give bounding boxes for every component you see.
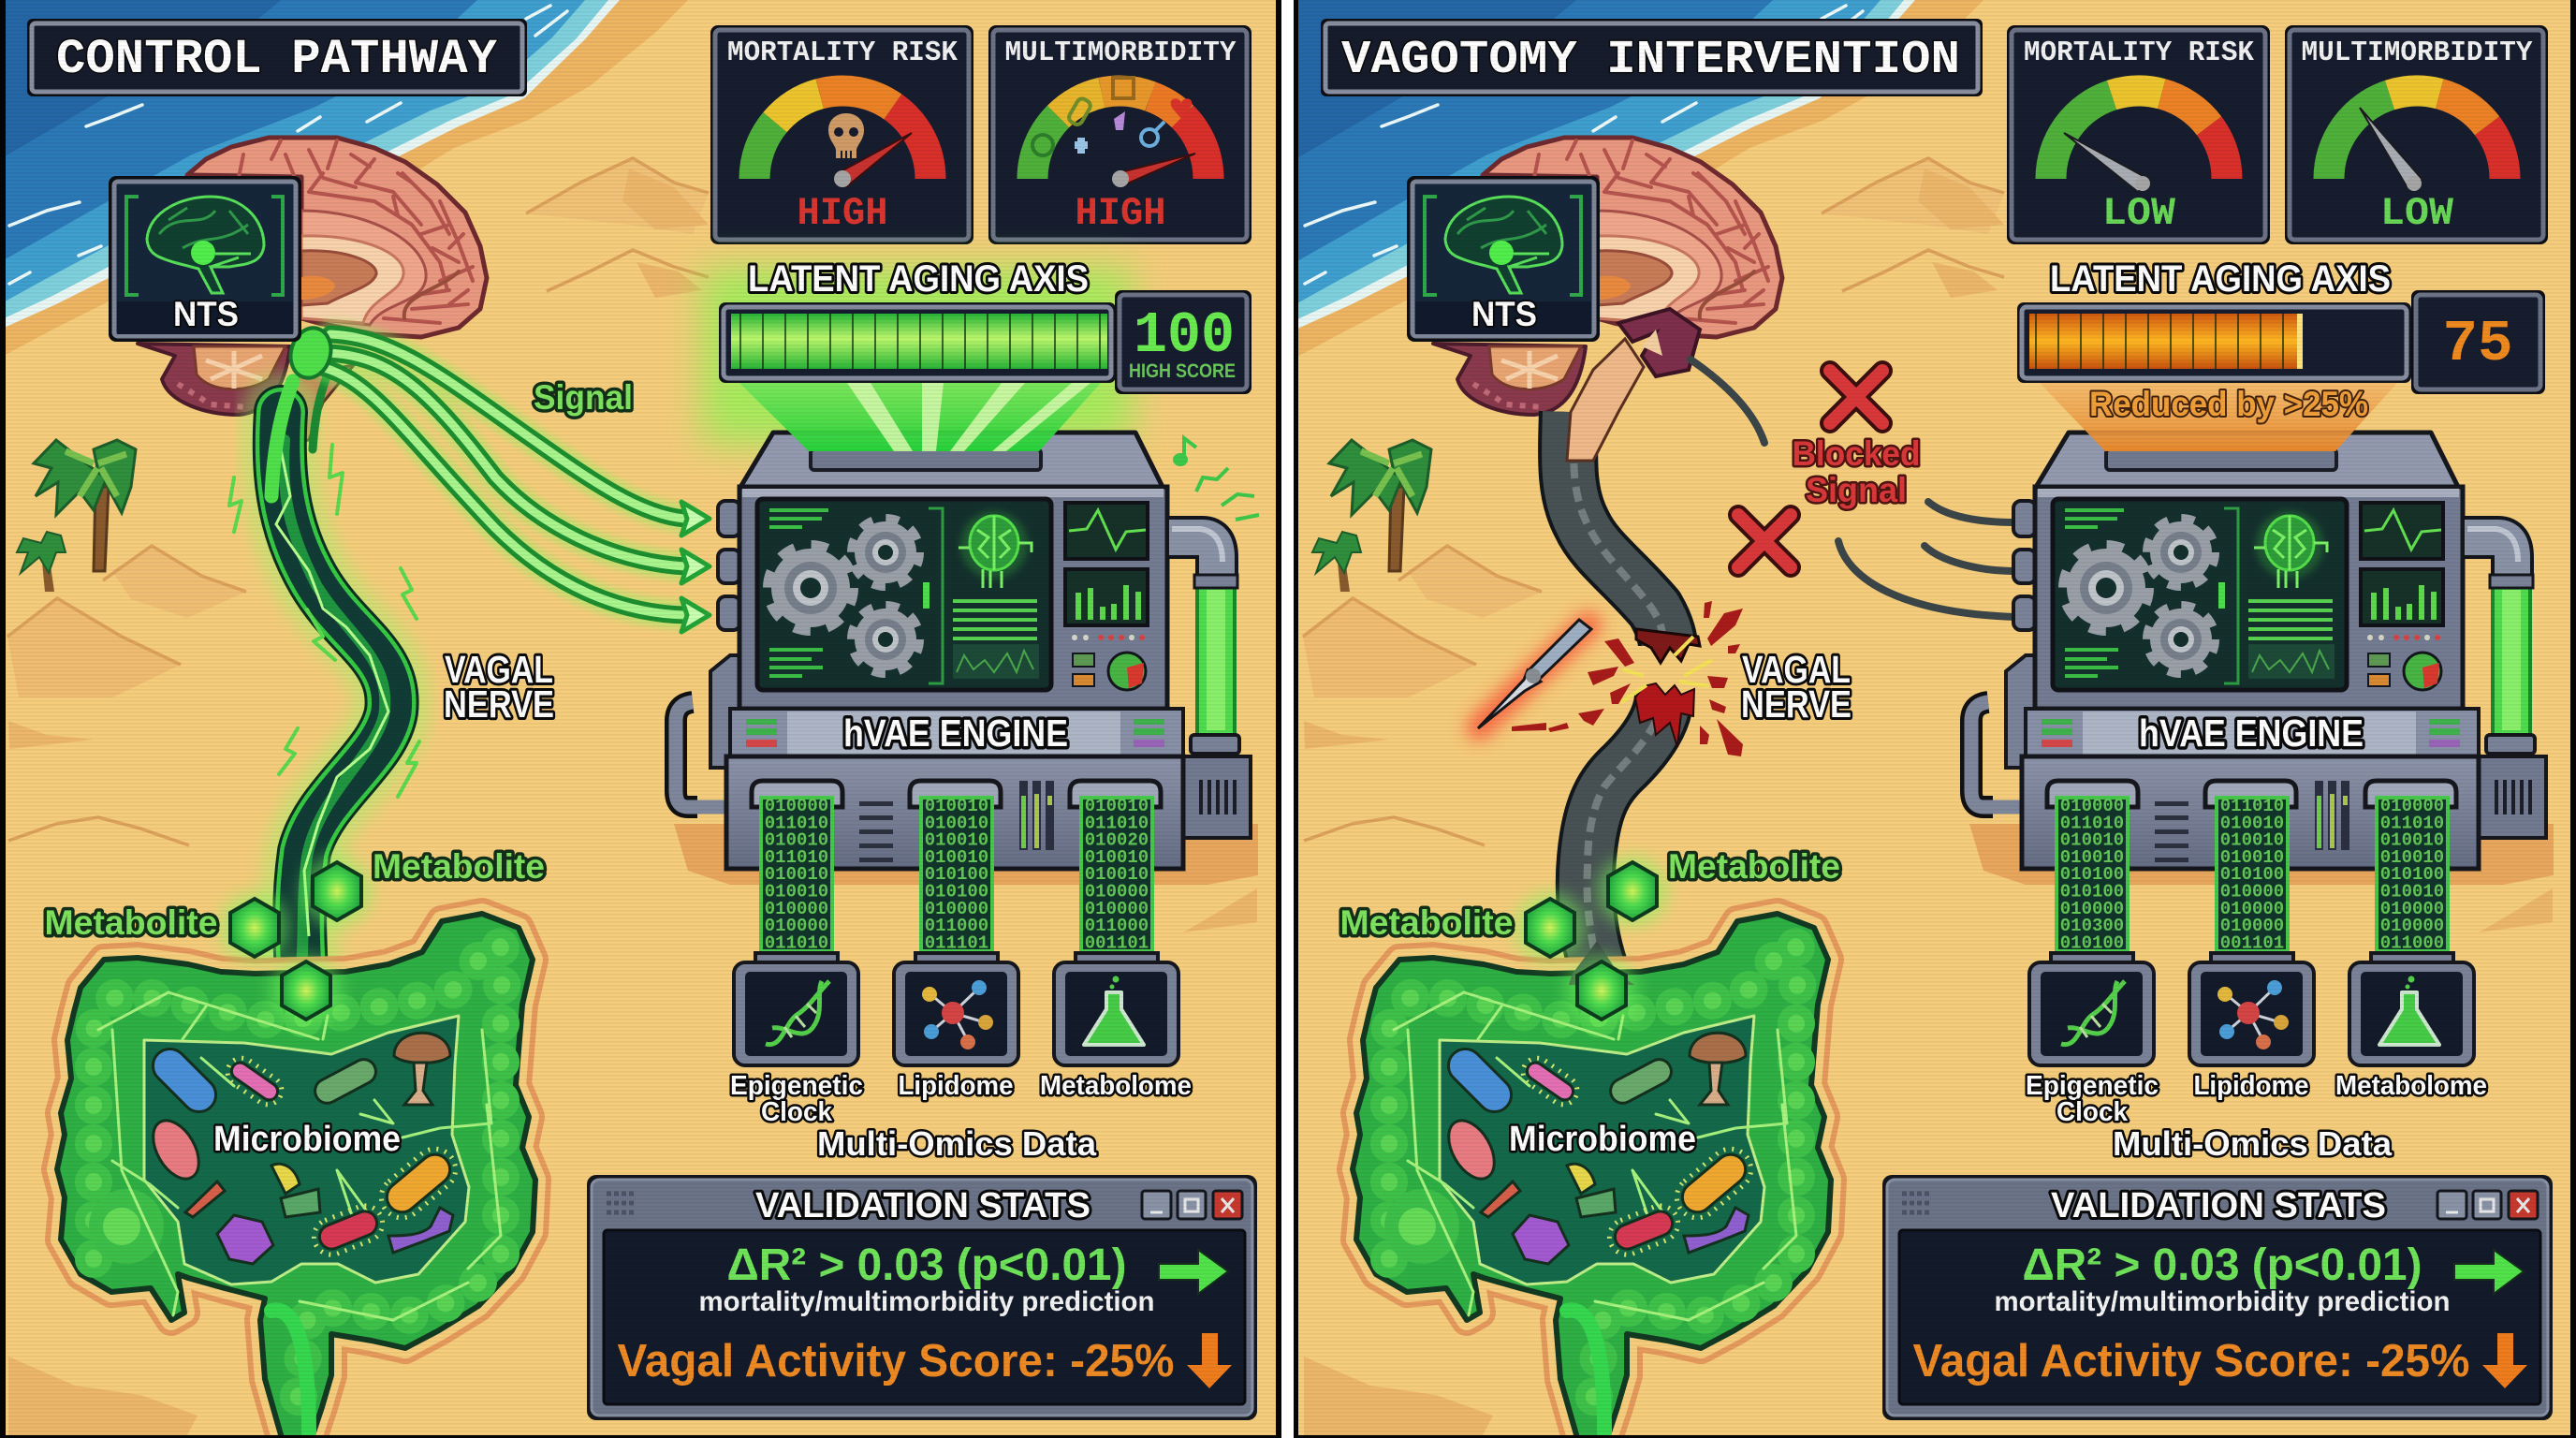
binary stream: epigenetic: 010100 <box>2060 882 2124 902</box>
binary stream: metabolome: 010010 <box>2380 882 2444 902</box>
binary stream: lipidome: 011000 <box>925 916 988 936</box>
severed nerve upper <box>1568 412 1700 663</box>
icon: DNA helix <box>766 981 829 1045</box>
binary stream: epigenetic: 011010 <box>765 847 828 868</box>
gauge: mortality risk LOW: MORTALITY RISK <box>2024 37 2254 69</box>
main screen <box>757 499 1051 690</box>
latent aging axis label: LATENT AGING AXIS <box>748 258 1089 300</box>
NTS inset <box>1407 176 1600 342</box>
title <box>27 19 527 96</box>
binary stream: metabolome: 010000 <box>1085 899 1149 919</box>
binary stream: lipidome: 010000 <box>925 899 988 919</box>
omics labels <box>730 1071 1192 1127</box>
vagal nerve label: VAGAL <box>445 648 553 691</box>
validation stats window: ΔR² > 0.03 (p<0.01) <box>726 1240 1127 1290</box>
binary stream: epigenetic: 010300 <box>2060 916 2124 936</box>
binary stream: metabolome: 011010 <box>1085 813 1149 833</box>
pipe and coolant tube <box>1169 529 1237 737</box>
binary stream: epigenetic: 010100 <box>2060 864 2124 885</box>
binary stream: lipidome: 010010 <box>925 830 988 851</box>
binary stream: lipidome: 010100 <box>2220 864 2284 885</box>
blocked mark lower <box>1738 515 1791 567</box>
score box 75: 75 <box>2443 311 2512 377</box>
cerebellum <box>138 344 290 415</box>
intestine with microbiome <box>1353 914 1831 1438</box>
blocked signal label <box>1792 434 1921 509</box>
dunes <box>7 158 1257 1435</box>
omics labels: Clock <box>761 1097 833 1127</box>
omics labels: Epigenetic <box>730 1071 863 1101</box>
binary stream: metabolome: 010000 <box>2380 899 2444 919</box>
binary stream: lipidome: 010100 <box>925 882 988 902</box>
icon: orange down arrow <box>1187 1333 1232 1388</box>
engine label: hVAE ENGINE <box>843 712 1068 755</box>
title <box>1321 19 1983 96</box>
brain <box>138 138 487 415</box>
icon: lipid molecule <box>922 980 993 1049</box>
severed nerve lower <box>1586 683 1694 978</box>
progress bar 100 <box>719 302 1116 383</box>
gauge: mortality risk LOW: LOW <box>2102 191 2176 236</box>
validation stats window: VALIDATION STATS <box>2051 1186 2386 1225</box>
metabolite hexagons <box>1515 856 1668 1026</box>
gauge: mortality risk HIGH: HIGH <box>798 191 887 236</box>
nerve branch to node <box>271 381 293 496</box>
validation stats window: mortality/multimorbidity prediction <box>698 1286 1155 1317</box>
dial arc <box>2051 91 2227 179</box>
microbe hairs <box>222 1052 464 1260</box>
omics icons <box>2029 953 2474 1065</box>
omics labels: Metabolome <box>1040 1071 1192 1101</box>
binary stream: metabolome: 010000 <box>1085 882 1149 902</box>
vagal nerve label: VAGAL <box>1742 648 1851 691</box>
omics labels: Clock <box>2056 1097 2129 1127</box>
signal arrows <box>325 334 710 632</box>
latent aging axis glow <box>702 267 1133 445</box>
signal label: Signal <box>534 378 633 417</box>
score box 100: HIGH SCORE <box>1129 360 1236 382</box>
gauge: multimorbidity LOW: MULTIMORBIDITY <box>2301 37 2533 69</box>
binary stream: lipidome: 010100 <box>925 864 988 885</box>
vagal nerve label <box>444 648 554 726</box>
binary stream: epigenetic: 011010 <box>2060 813 2124 833</box>
engine label: hVAE ENGINE <box>2139 712 2364 755</box>
omics labels: Epigenetic <box>2026 1071 2159 1101</box>
validation stats window <box>1882 1175 2553 1420</box>
validation stats window <box>587 1175 1257 1420</box>
microbiome label: Microbiome <box>1509 1120 1696 1159</box>
metabolite label lower: Metabolite <box>1340 903 1513 942</box>
icon: skull <box>828 113 864 158</box>
gauge: multimorbidity HIGH: HIGH <box>1075 191 1166 236</box>
NTS inset <box>109 176 301 342</box>
omics labels: Lipidome <box>899 1071 1013 1101</box>
veins <box>98 992 501 1320</box>
omics labels <box>2026 1071 2487 1127</box>
background: beach, sea, dunes and palms <box>0 0 1282 1438</box>
needle <box>834 133 912 187</box>
metabolite hexagons <box>219 856 373 1026</box>
window buttons <box>1142 1191 1242 1219</box>
binary stream: metabolome: 010010 <box>1085 796 1149 816</box>
binary stream: metabolome: 011000 <box>2380 932 2444 953</box>
NTS node <box>288 326 333 380</box>
blocked signal label: Signal <box>1806 471 1907 509</box>
binary stream: metabolome: 010000 <box>2380 916 2444 936</box>
binary stream: epigenetic: 010000 <box>765 916 828 936</box>
validation stats window: mortality/multimorbidity prediction <box>1994 1286 2451 1317</box>
binary stream: lipidome: 010010 <box>2220 830 2284 851</box>
background: beach, sea, dunes and palms <box>1295 0 2576 1438</box>
intestine with microbiome <box>57 914 535 1438</box>
metabolite label upper: Metabolite <box>373 847 545 886</box>
panel: control pathway <box>0 0 1282 1438</box>
multi-omics data label: Multi-Omics Data <box>817 1124 1097 1163</box>
latent aging axis label: LATENT AGING AXIS <box>2050 258 2391 300</box>
vagal nerve label <box>1741 648 1852 726</box>
paper slots <box>752 781 1161 807</box>
binary stream: lipidome: 010010 <box>2220 813 2284 833</box>
blocked mark upper <box>1830 371 1882 423</box>
score box 100 <box>1115 290 1251 394</box>
vagal nerve (glowing) <box>271 374 392 974</box>
progress bar 75 <box>2017 302 2411 383</box>
icons: disease symbols <box>1032 78 1192 155</box>
binary stream: epigenetic: 010010 <box>765 830 828 851</box>
binary stream: epigenetic: 011010 <box>765 932 828 953</box>
NTS label: NTS <box>1471 295 1537 333</box>
brain <box>1433 138 1782 415</box>
musical glitches <box>1175 438 1259 520</box>
window grip <box>607 1194 637 1212</box>
binary stream: metabolome: 010010 <box>2380 830 2444 851</box>
multi-omics data label: Multi-Omics Data <box>2113 1124 2393 1163</box>
needle <box>2064 133 2150 192</box>
gauge: multimorbidity HIGH: MULTIMORBIDITY <box>1005 37 1237 69</box>
lower chassis <box>726 735 1251 869</box>
binary stream: epigenetic: 010010 <box>2060 830 2124 851</box>
binary stream: metabolome: 010010 <box>1085 847 1149 868</box>
validation stats window: VALIDATION STATS <box>755 1186 1090 1225</box>
title: CONTROL PATHWAY <box>56 32 498 87</box>
inner cavity <box>144 1016 469 1284</box>
side monitors <box>1065 503 1148 690</box>
microbes <box>144 1033 456 1264</box>
binary stream: epigenetic: 010010 <box>765 864 828 885</box>
icon: green arrow <box>1159 1250 1228 1294</box>
blocked signal label: Blocked <box>1792 434 1921 473</box>
screen brain <box>959 511 1032 588</box>
icon: flask <box>1084 976 1144 1045</box>
microbiome label: Microbiome <box>213 1120 401 1159</box>
binary stream: lipidome: 010010 <box>925 813 988 833</box>
binary stream: epigenetic: 010000 <box>765 899 828 919</box>
metabolite label upper: Metabolite <box>1668 847 1840 886</box>
gears <box>769 520 918 672</box>
gauge: mortality risk LOW <box>2007 25 2270 244</box>
validation stats window: Vagal Activity Score: -25% <box>1913 1336 2469 1387</box>
blood splatter and spark <box>1512 601 1743 756</box>
binary stream: epigenetic: 010100 <box>2060 932 2124 953</box>
validation stats window: Vagal Activity Score: -25% <box>618 1336 1174 1387</box>
binary stream: metabolome: 001101 <box>1085 932 1149 953</box>
gauge: multimorbidity LOW: LOW <box>2380 191 2454 236</box>
omics labels: Metabolome <box>2335 1071 2487 1101</box>
binary stream: lipidome: 010000 <box>2220 899 2284 919</box>
dial arc <box>1032 91 1208 179</box>
binary stream: metabolome: 010020 <box>1085 830 1149 851</box>
cut brain stem <box>1567 309 1700 461</box>
NTS label: NTS <box>173 295 239 333</box>
omics icons <box>734 953 1178 1065</box>
light beam onto axis <box>739 383 1101 451</box>
binary stream: epigenetic: 010000 <box>765 796 828 816</box>
haustral bumps <box>94 941 504 1404</box>
orange beam <box>2040 383 2397 451</box>
data strips <box>761 798 1152 951</box>
main cabinet <box>739 487 1167 709</box>
binary stream: metabolome: 011000 <box>1085 916 1149 936</box>
binary stream: lipidome: 010010 <box>925 796 988 816</box>
spark lightning <box>229 445 419 797</box>
dial arc <box>2329 91 2505 179</box>
binary stream: epigenetic: 010000 <box>2060 796 2124 816</box>
dark nerve end entering gut <box>1569 941 1634 985</box>
gauge: multimorbidity HIGH <box>988 25 1251 244</box>
binary stream: lipidome: 001101 <box>2220 932 2284 953</box>
top housing <box>739 433 1164 489</box>
score box 75 <box>2411 290 2545 394</box>
cut end upper <box>1636 629 1700 663</box>
binary stream: lipidome: 010000 <box>2220 882 2284 902</box>
binary stream: epigenetic: 011010 <box>765 813 828 833</box>
dial arc <box>754 91 930 179</box>
reduced label: Reduced by >25% <box>2089 385 2368 423</box>
binary stream: metabolome: 010010 <box>1085 864 1149 885</box>
binary stream: metabolome: 011010 <box>2380 813 2444 833</box>
binary stream: lipidome: 011101 <box>925 932 988 953</box>
validation stats window: ΔR² > 0.03 (p<0.01) <box>2022 1240 2422 1290</box>
hVAE engine machine <box>674 433 1258 951</box>
brain stem <box>298 364 356 442</box>
score box 100: 100 <box>1134 302 1235 369</box>
gauge: mortality risk HIGH <box>710 25 973 244</box>
cut end lower <box>1635 683 1694 747</box>
binary stream: lipidome: 011010 <box>2220 796 2284 816</box>
binary stream: metabolome: 010100 <box>2380 864 2444 885</box>
metabolite label lower: Metabolite <box>45 903 217 942</box>
title: VAGOTOMY INTERVENTION <box>1341 34 1960 87</box>
needle <box>2360 108 2422 191</box>
binary stream: epigenetic: 010000 <box>2060 899 2124 919</box>
cerebrum <box>187 138 487 337</box>
gauge: multimorbidity LOW <box>2285 25 2548 244</box>
binary stream: epigenetic: 010010 <box>765 882 828 902</box>
control band <box>730 709 1183 757</box>
binary stream: lipidome: 010010 <box>2220 847 2284 868</box>
needle <box>1112 154 1195 187</box>
vagal nerve label: NERVE <box>444 682 554 726</box>
binary stream: metabolome: 010000 <box>2380 796 2444 816</box>
panel: vagotomy intervention <box>1295 0 2576 1438</box>
gauge: mortality risk HIGH: MORTALITY RISK <box>727 37 958 69</box>
hVAE engine machine <box>1969 433 2554 951</box>
binary stream: lipidome: 010010 <box>925 847 988 868</box>
binary stream: metabolome: 010010 <box>2380 847 2444 868</box>
binary stream: lipidome: 010000 <box>2220 916 2284 936</box>
blocked severed cables <box>1690 360 2015 617</box>
omics labels: Lipidome <box>2194 1071 2308 1101</box>
scalpel <box>1478 620 1591 728</box>
palm tree <box>17 440 136 592</box>
vagal nerve label: NERVE <box>1741 682 1852 726</box>
binary stream: epigenetic: 010010 <box>2060 847 2124 868</box>
